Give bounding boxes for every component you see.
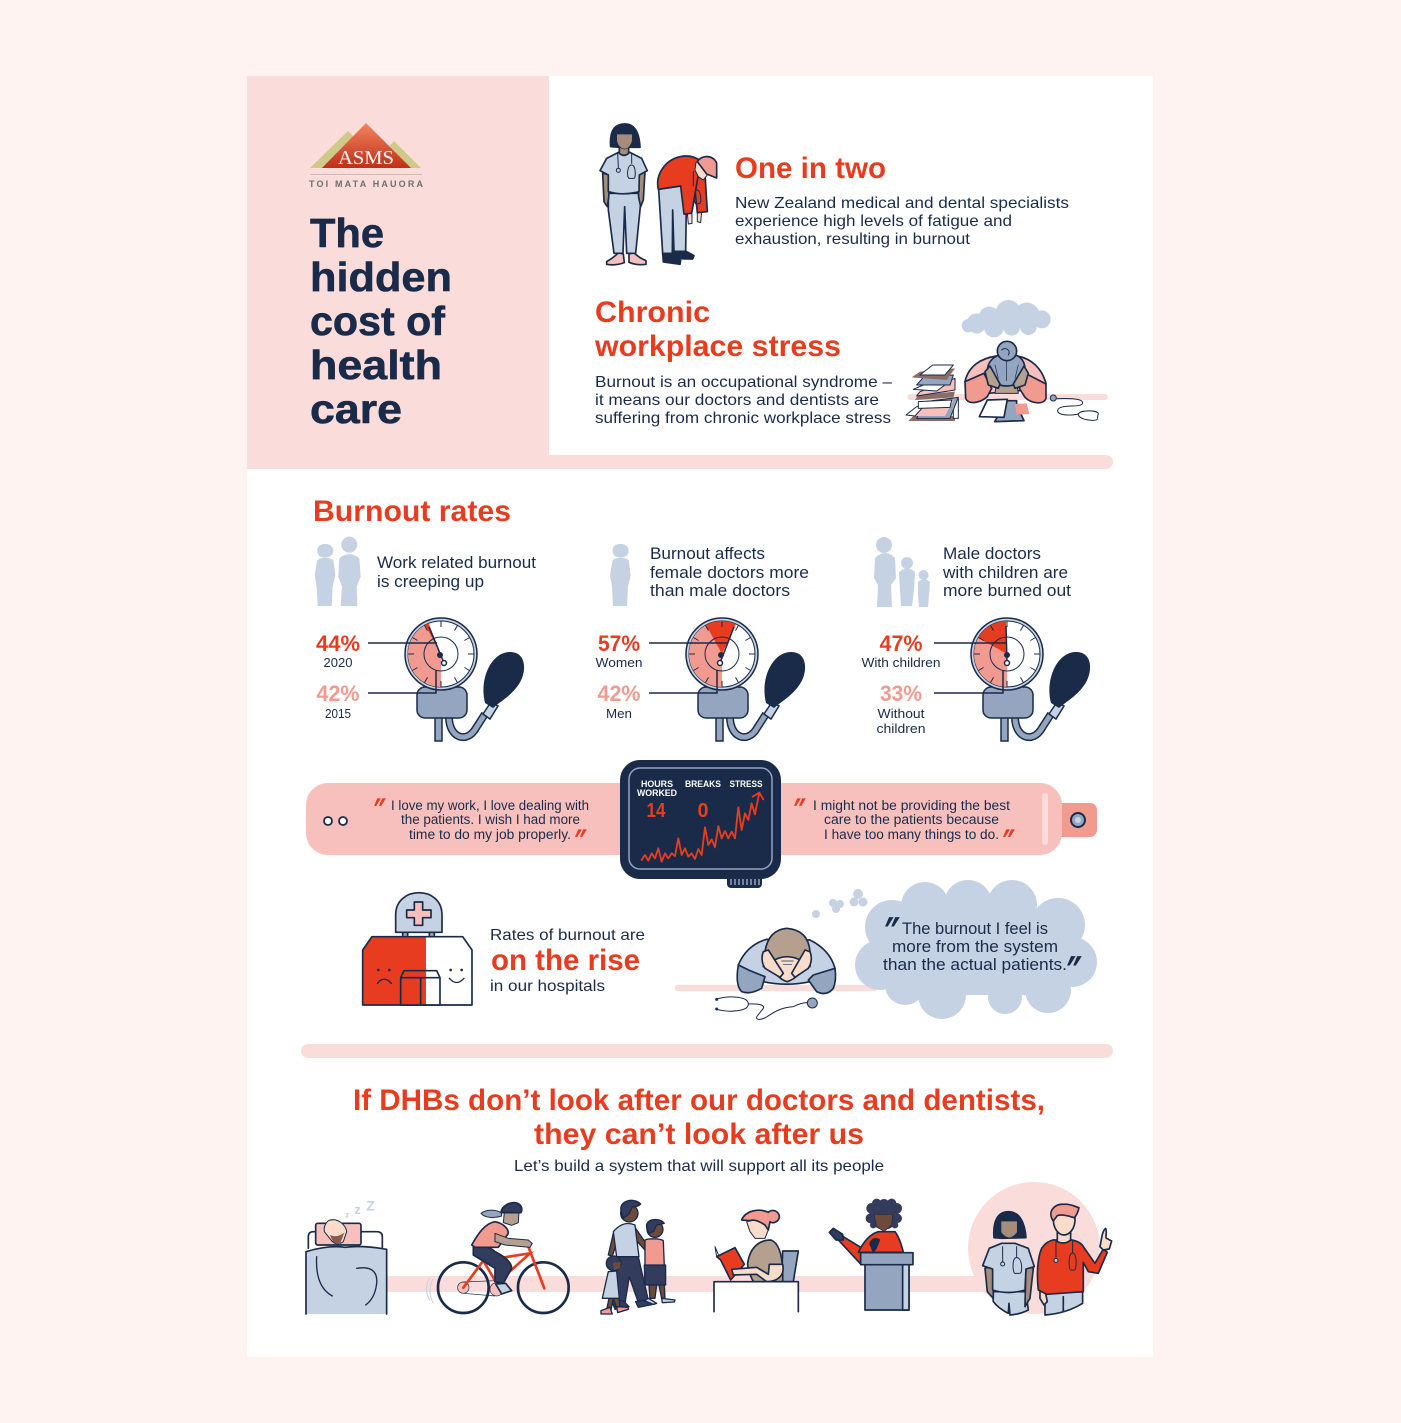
text (942, 545, 1071, 600)
quote: right: ″ (1003, 821, 1015, 870)
divider bar top (540, 455, 1113, 469)
text: one in two (735, 152, 1069, 248)
text: one in two: One in two (735, 152, 886, 185)
quote: right: care to the patients because (824, 812, 999, 827)
logo: ASMS (309, 123, 424, 189)
icon: family (601, 1200, 675, 1314)
text: Male doctors (943, 545, 1041, 563)
quote: left: the patients. I wish I had more (401, 812, 580, 827)
title (310, 210, 452, 432)
text: chronic workplace stress: Chronic (595, 296, 710, 329)
text: on the rise: Rates of burnout are (490, 927, 645, 944)
line chart: stress (642, 793, 763, 862)
illustration: stressed woman at desk (906, 300, 1108, 422)
icon: silhouettes (315, 537, 361, 606)
stat: 33% without children: children (876, 721, 926, 736)
path band and circle (385, 1182, 1100, 1314)
monitor: stress display: 0 (698, 800, 708, 822)
title: cost of (310, 298, 445, 344)
headline: call to action: they can’t look after us (534, 1118, 864, 1151)
icon: zzz: z (345, 1209, 350, 1219)
headline: call to action: Let’s build a system that will support all its people (514, 1158, 884, 1175)
thought cloud: quote (812, 880, 1097, 1019)
text: chronic workplace stress: Burnout is an occupational syndrome – (595, 374, 892, 391)
stat: 42% men: 42% (598, 681, 640, 706)
illustrations: sleep, cycle, family (306, 1198, 675, 1314)
text: Burnout affects (650, 545, 765, 563)
text: Work related burnout (377, 554, 536, 572)
thought cloud: quote: ″ (1067, 947, 1082, 1007)
blood pressure gauge (649, 618, 805, 741)
text: female doctors more (650, 564, 809, 582)
quote: left: ″ (374, 790, 386, 839)
quote: left (374, 790, 589, 870)
icon: zzz (345, 1198, 375, 1219)
stat: 42% men (598, 681, 640, 721)
stat: 57% women: Women (596, 655, 642, 670)
monitor: stress display: STRESS (730, 779, 762, 789)
text: more burned out (943, 582, 1071, 600)
title: care (310, 386, 402, 432)
text: on the rise: on the rise (491, 944, 640, 977)
thought cloud: quote: ″ (885, 908, 900, 968)
quote: right (794, 790, 1015, 870)
text: on the rise (490, 927, 645, 995)
panel: title (247, 76, 549, 469)
text: one in two: exhaustion, resulting in burnout (735, 231, 971, 248)
text (377, 554, 536, 591)
blood pressure gauge (934, 618, 1090, 741)
illustration: doctor head in hands (675, 928, 877, 1019)
text: with children are (942, 564, 1068, 582)
quote: right: I have too many things to do. (824, 827, 999, 842)
monitor: stress display: 14 (646, 800, 666, 822)
icon: cyclist (426, 1203, 569, 1313)
illustrations: reading, speaking, doctors (714, 1199, 1112, 1315)
panel: work related burnout (315, 537, 536, 741)
monitor: stress display: BREAKS (685, 779, 721, 789)
stat: 42% 2015: 42% (316, 681, 360, 706)
stat: 44% 2020: 2020 (324, 655, 352, 670)
text: on the rise: in our hospitals (490, 978, 605, 995)
stat: 42% men: Men (606, 706, 632, 721)
stat: 42% 2015 (316, 681, 360, 721)
quote: left: time to do my job properly. (409, 827, 571, 842)
quote: right: ″ (794, 790, 806, 839)
text: is creeping up (377, 573, 484, 591)
stat: 47% with children: With children (862, 655, 940, 670)
text: chronic workplace stress (594, 296, 892, 427)
stat: 47% with children (862, 631, 940, 670)
text: chronic workplace stress: workplace stress (594, 330, 841, 363)
icon: reading person (714, 1210, 798, 1312)
blood pressure cuff band (306, 783, 1097, 855)
stat: 44% 2020: 44% (316, 631, 360, 656)
icon: sleeping person (306, 1220, 387, 1314)
title: hidden (310, 254, 452, 300)
stat: 57% women: 57% (598, 631, 640, 656)
stat: 57% women (596, 631, 642, 670)
logo: ASMS: TOI MATA HAUORA (309, 179, 424, 189)
white page card (247, 76, 1153, 1357)
heading: burnout rates: Burnout rates (313, 495, 511, 528)
quote: left: ″ (575, 821, 587, 870)
stat: 44% 2020 (316, 631, 360, 670)
text: one in two: experience high levels of fatigue and (735, 213, 1012, 230)
stat: 33% without children: Without (878, 706, 925, 721)
headline: call to action (353, 1084, 1045, 1175)
monitor: stress display: HOURS (641, 779, 673, 789)
icon: zzz: z (354, 1203, 361, 1217)
logo: ASMS: ASMS (338, 147, 394, 169)
icon: happy doctors (983, 1204, 1112, 1315)
panel: male doctors with children (862, 537, 1090, 741)
icon: hospital (363, 893, 472, 1005)
blood pressure gauge (368, 618, 524, 741)
monitor: stress display (620, 760, 781, 888)
icon: silhouette (610, 544, 631, 606)
thought cloud: quote: The burnout I feel is (902, 919, 1048, 938)
divider bar lower (301, 1044, 1113, 1058)
text: than male doctors (650, 582, 790, 600)
stat: 33% without children: 33% (880, 681, 922, 706)
monitor: stress display: WORKED (637, 788, 677, 798)
title: health (310, 342, 442, 388)
quote: right: I might not be providing the best (813, 798, 1010, 813)
stat: 33% without children (876, 681, 926, 736)
stat: 42% 2015: 2015 (325, 706, 351, 721)
thought cloud: quote: more from the system (892, 937, 1058, 956)
text: chronic workplace stress: suffering from chronic workplace stress (595, 410, 891, 427)
title: The (310, 210, 384, 256)
thought cloud: quote: than the actual patients. (883, 955, 1067, 974)
text: chronic workplace stress: it means our doctors and dentists are (595, 392, 879, 409)
stat: 47% with children: 47% (880, 631, 922, 656)
panel: female doctors (596, 544, 809, 741)
icon: speaker at podium (829, 1199, 913, 1310)
text (650, 545, 809, 600)
text: one in two: New Zealand medical and dental specialists (735, 195, 1069, 212)
icon: silhouettes (874, 537, 930, 607)
quote: left: I love my work, I love dealing with (391, 798, 589, 813)
headline: call to action: If DHBs don’t look after our doctors and dentists, (353, 1084, 1045, 1117)
illustration: standing and bent doctors (600, 124, 717, 265)
icon: zzz: Z (366, 1198, 375, 1214)
